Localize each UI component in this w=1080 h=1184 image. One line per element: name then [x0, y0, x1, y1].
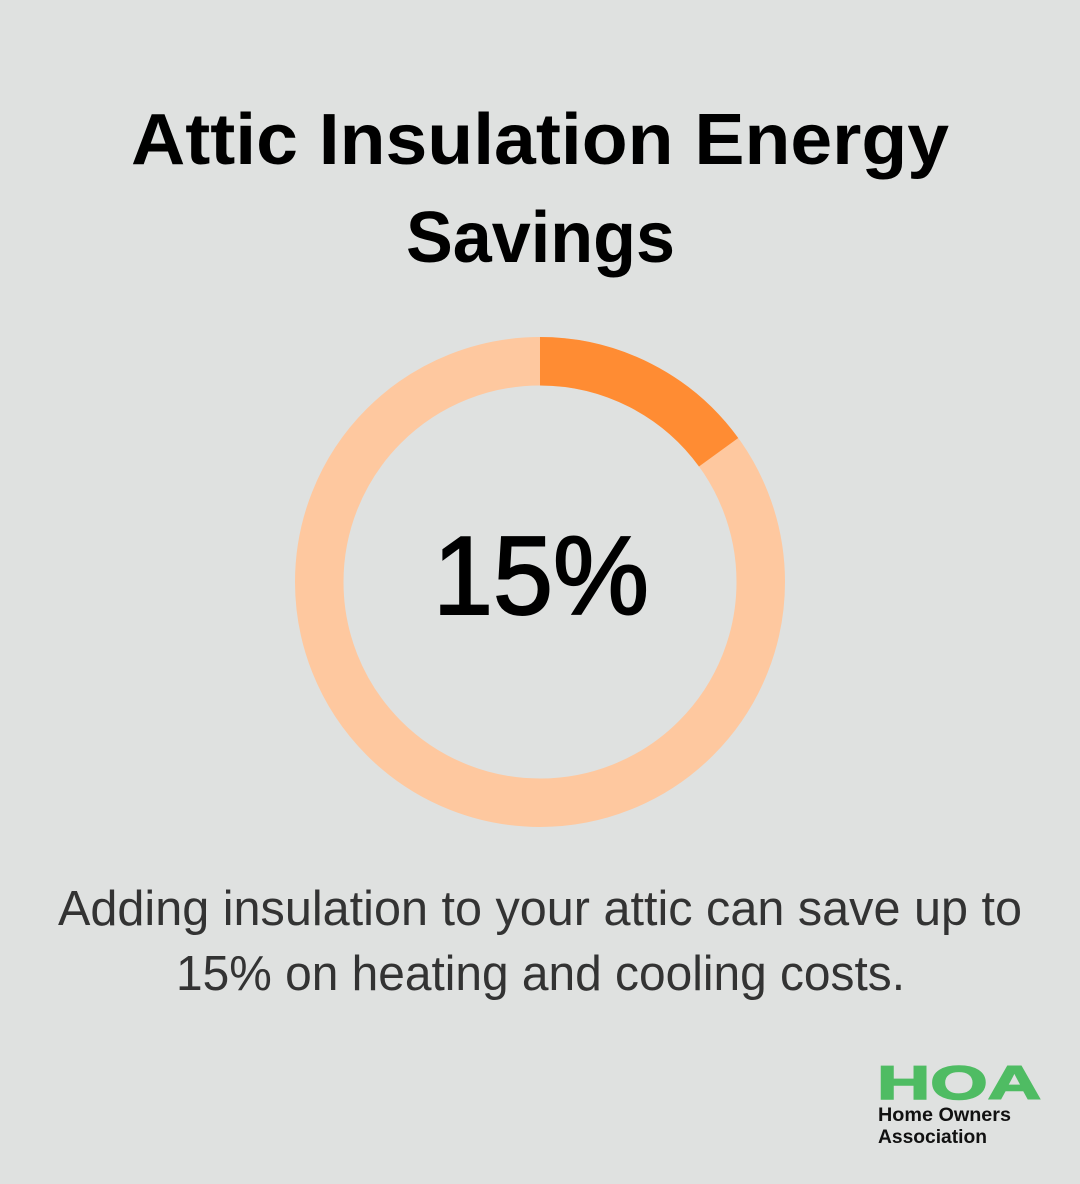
donut chart: 15% [319, 361, 761, 803]
description: Adding insulation to your attic can save up to [58, 882, 1022, 936]
logo name: Association [878, 1127, 987, 1148]
logo: HOA [877, 1056, 1041, 1148]
description [58, 882, 1022, 1001]
donut highlighted segment [540, 361, 719, 452]
title: Attic Insulation Energy [131, 100, 949, 180]
title: Savings [406, 198, 675, 278]
donut track [319, 361, 761, 803]
logo name: Home Owners [878, 1105, 1011, 1126]
logo mark letters: HOA [877, 1056, 1041, 1109]
logo name [878, 1105, 1011, 1148]
center value: 15% [433, 514, 649, 638]
title [131, 100, 949, 278]
description: 15% on heating and cooling costs. [176, 947, 905, 1001]
